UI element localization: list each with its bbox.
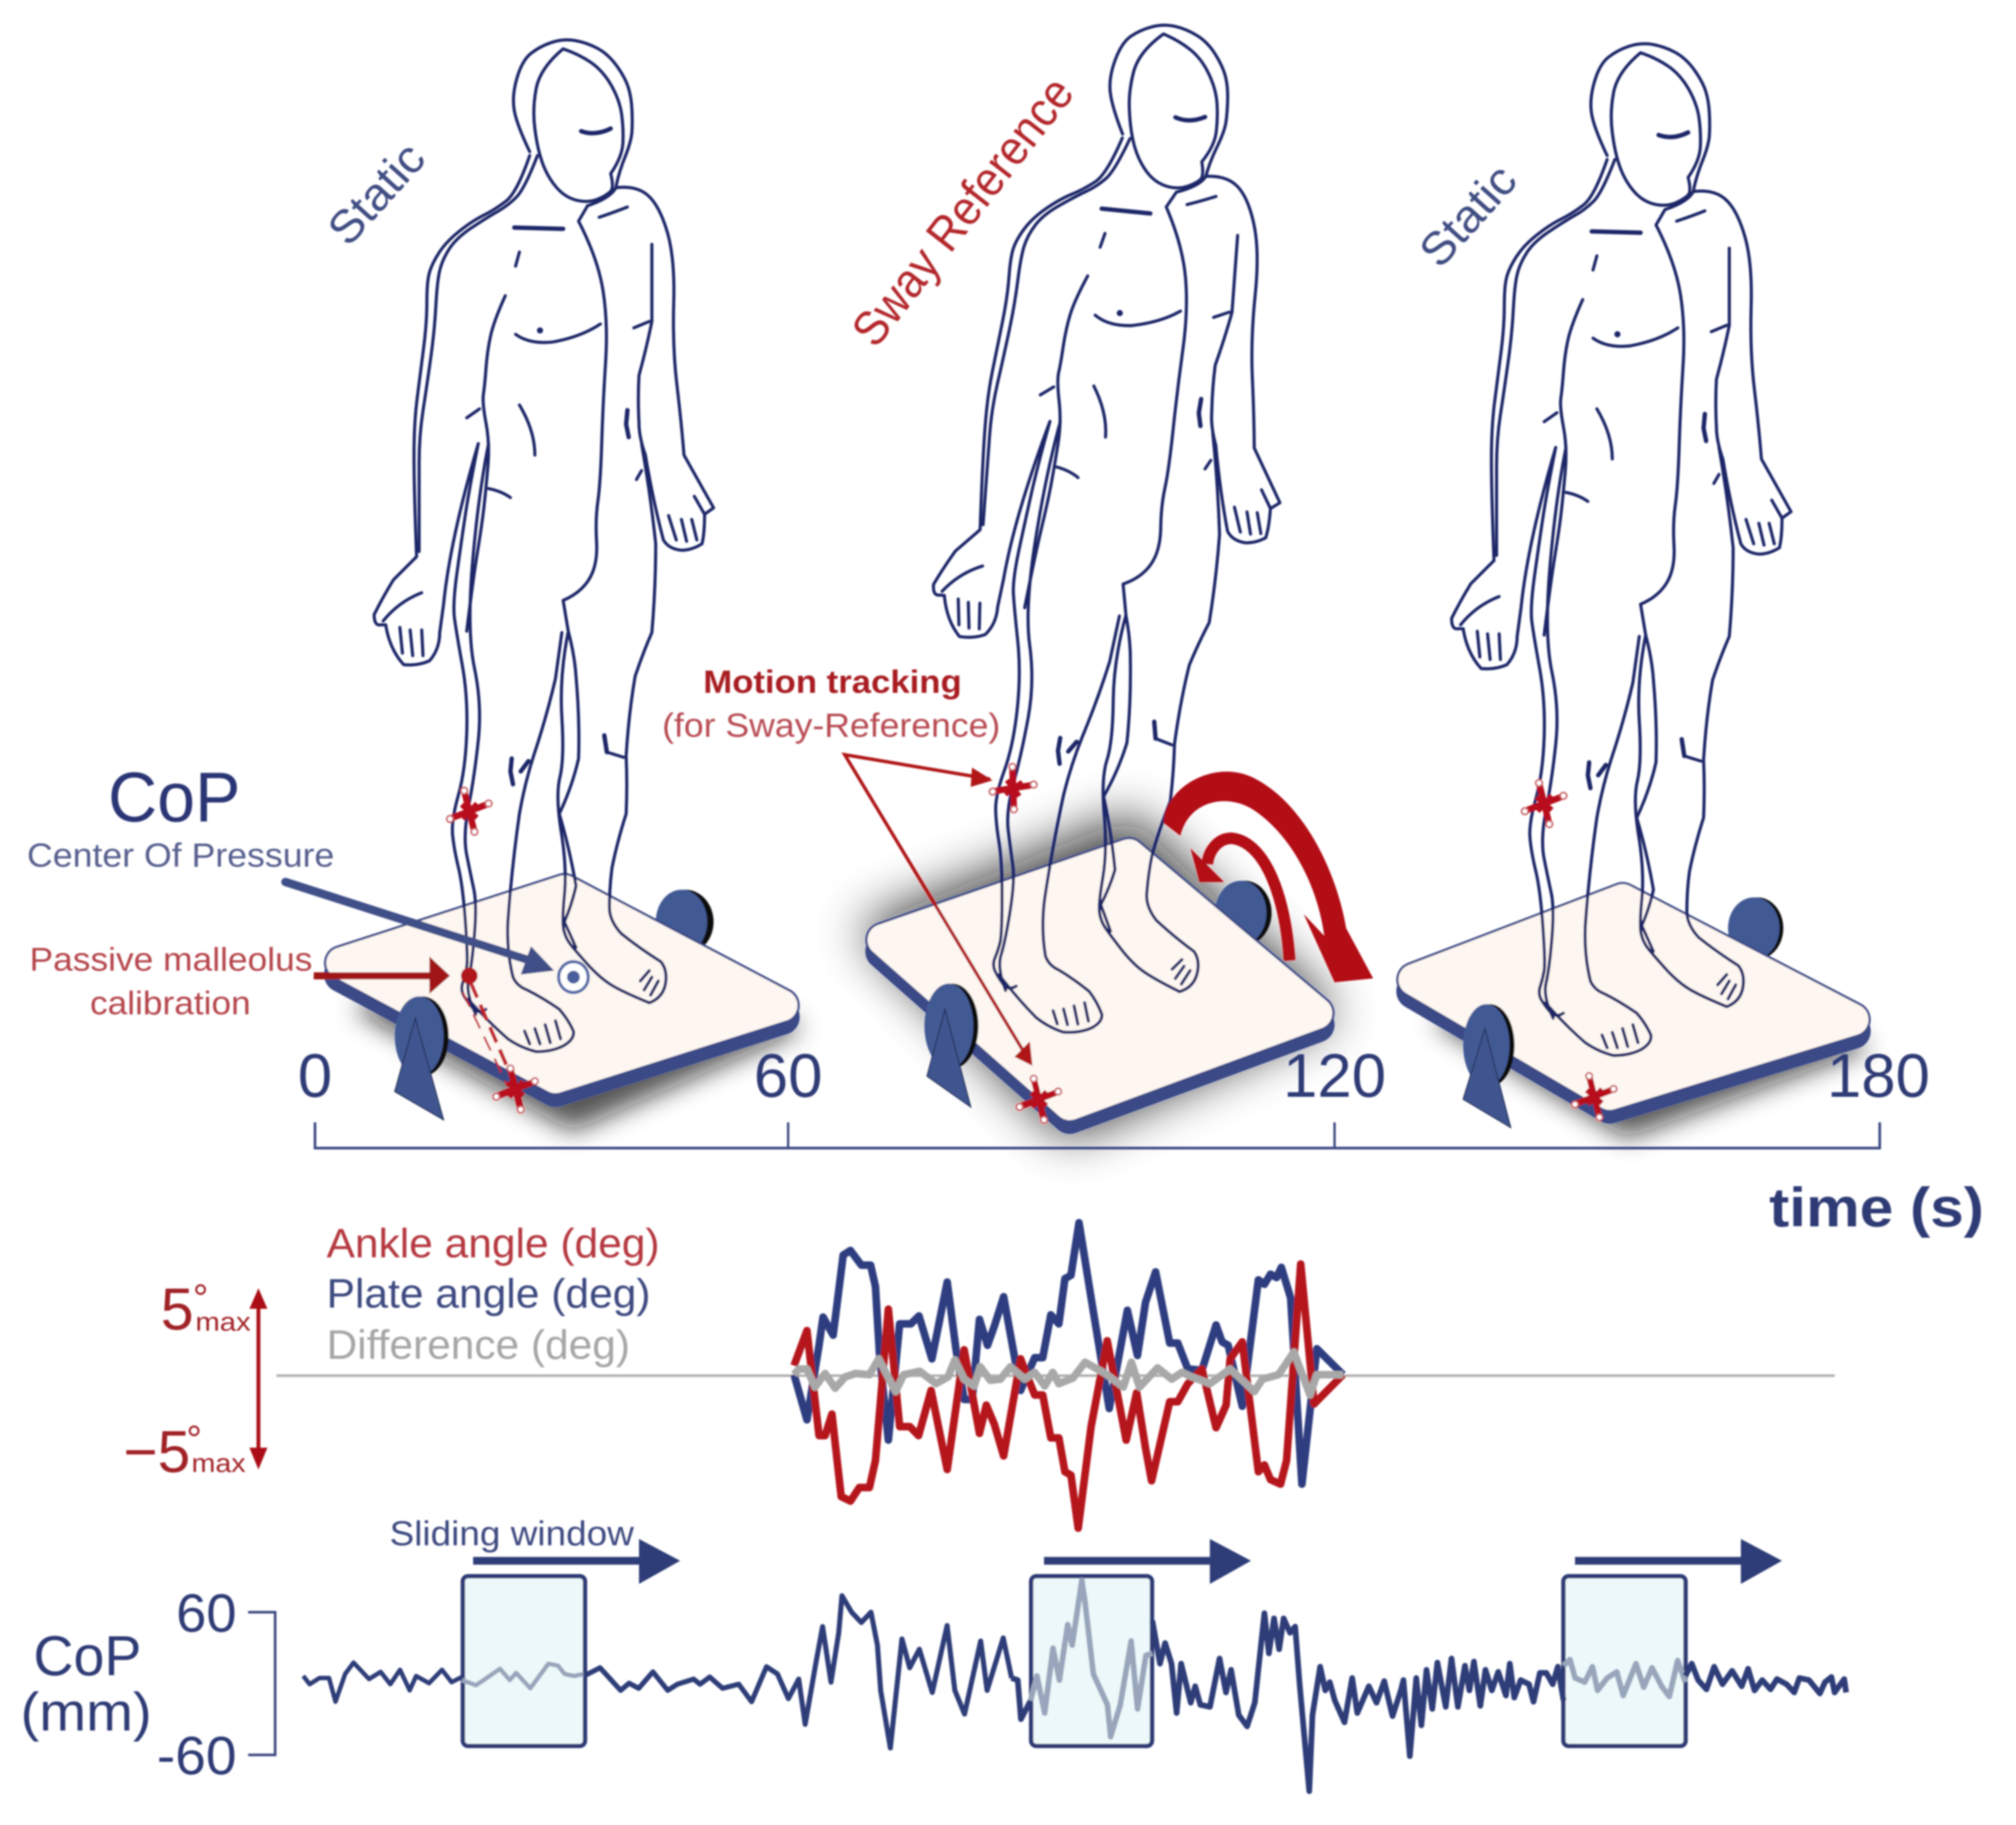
y scale labels: max xyxy=(195,1307,251,1336)
legend xyxy=(327,1220,659,1368)
arrow: sliding 1 xyxy=(473,1539,680,1584)
axis numbers xyxy=(298,1041,1930,1110)
time axis xyxy=(315,1123,1879,1148)
CoP axis title xyxy=(21,1624,152,1743)
icon: CoP target xyxy=(559,961,588,992)
label: Static 2: Static xyxy=(1409,154,1527,277)
label: Sway Reference: Sway Reference xyxy=(841,66,1084,357)
text: Passive malleolus calibration: Passive malleolus xyxy=(30,941,312,978)
marker: plate 1 xyxy=(493,1065,538,1113)
CoP axis title: CoP xyxy=(34,1624,142,1687)
figure: static standing person 1 xyxy=(374,40,714,1052)
marker: leg 2 xyxy=(986,760,1040,816)
arrow: sliding 3 xyxy=(1575,1539,1782,1584)
arrow: big tilt xyxy=(1164,772,1373,982)
CoP axis title: (mm) xyxy=(21,1683,152,1743)
axis numbers: 60 xyxy=(754,1041,822,1110)
sliding window box 2 xyxy=(1031,1576,1152,1746)
CoP scale labels: 60 xyxy=(176,1584,236,1644)
text: Passive malleolus calibration xyxy=(30,941,312,1022)
text: Sliding window: Sliding window xyxy=(389,1514,634,1553)
arrow: small tilt xyxy=(1190,838,1290,960)
y scale labels: ° xyxy=(193,1276,208,1319)
legend: Plate angle (deg) xyxy=(327,1270,651,1316)
text: for Sway-Reference: (for Sway-Reference) xyxy=(662,707,1000,744)
legend: Ankle angle (deg) xyxy=(327,1220,659,1266)
chart: difference xyxy=(794,1352,1343,1395)
chart: plate angle xyxy=(794,1223,1343,1484)
CoP scale labels: -60 xyxy=(157,1726,236,1786)
marker: leg 3 xyxy=(1522,780,1567,827)
legend: Difference (deg) xyxy=(327,1322,630,1368)
chart: CoP trace part 1 xyxy=(303,1596,1011,1748)
y scale labels: −5 xyxy=(123,1419,190,1485)
text: Passive malleolus calibration: calibration xyxy=(90,985,251,1022)
zero line xyxy=(276,1375,1835,1376)
platform 1 xyxy=(342,889,803,1132)
double arrow: degree range xyxy=(250,1288,267,1470)
axis numbers: 0 xyxy=(298,1041,332,1110)
axis numbers: 120 xyxy=(1283,1041,1386,1110)
marker: plate 3 xyxy=(1572,1073,1617,1120)
arrows: motion tracking xyxy=(845,755,1032,1066)
marker: leg 1 xyxy=(447,788,492,835)
ticks xyxy=(788,1123,1335,1148)
heading: CoP: CoP xyxy=(108,758,240,837)
chart: CoP trace part 2 xyxy=(1011,1580,1846,1791)
text: Motion tracking: Motion tracking xyxy=(703,664,962,700)
y scale labels: ° xyxy=(186,1418,202,1461)
marker: plate 2 xyxy=(1017,1075,1061,1123)
y scale labels: 5 xyxy=(161,1276,193,1342)
text: Center Of Pressure: Center Of Pressure xyxy=(27,837,334,874)
y scale labels: max xyxy=(192,1449,245,1478)
sliding window box 3 xyxy=(1563,1576,1685,1746)
CoP scale labels xyxy=(157,1584,236,1786)
platform 2 xyxy=(859,816,1337,1138)
axis title: time (s): time (s) xyxy=(1769,1176,1984,1238)
arrow: sliding 2 xyxy=(1044,1539,1251,1584)
y scale labels xyxy=(123,1276,251,1485)
CoP bracket xyxy=(248,1612,275,1755)
label: Static 1: Static xyxy=(317,132,435,255)
arrow: center of pressure xyxy=(286,882,554,975)
figure: static standing person 3 xyxy=(1451,44,1791,1056)
axis numbers: 180 xyxy=(1827,1041,1930,1110)
platform 3 xyxy=(1414,898,1871,1138)
figure: sway-reference standing person xyxy=(901,11,1314,1045)
sliding window box 1 xyxy=(463,1576,585,1746)
arrow: malleolus calibration xyxy=(314,956,450,994)
malleolus dashed marker xyxy=(461,967,516,1087)
chart: ankle angle xyxy=(794,1264,1343,1528)
